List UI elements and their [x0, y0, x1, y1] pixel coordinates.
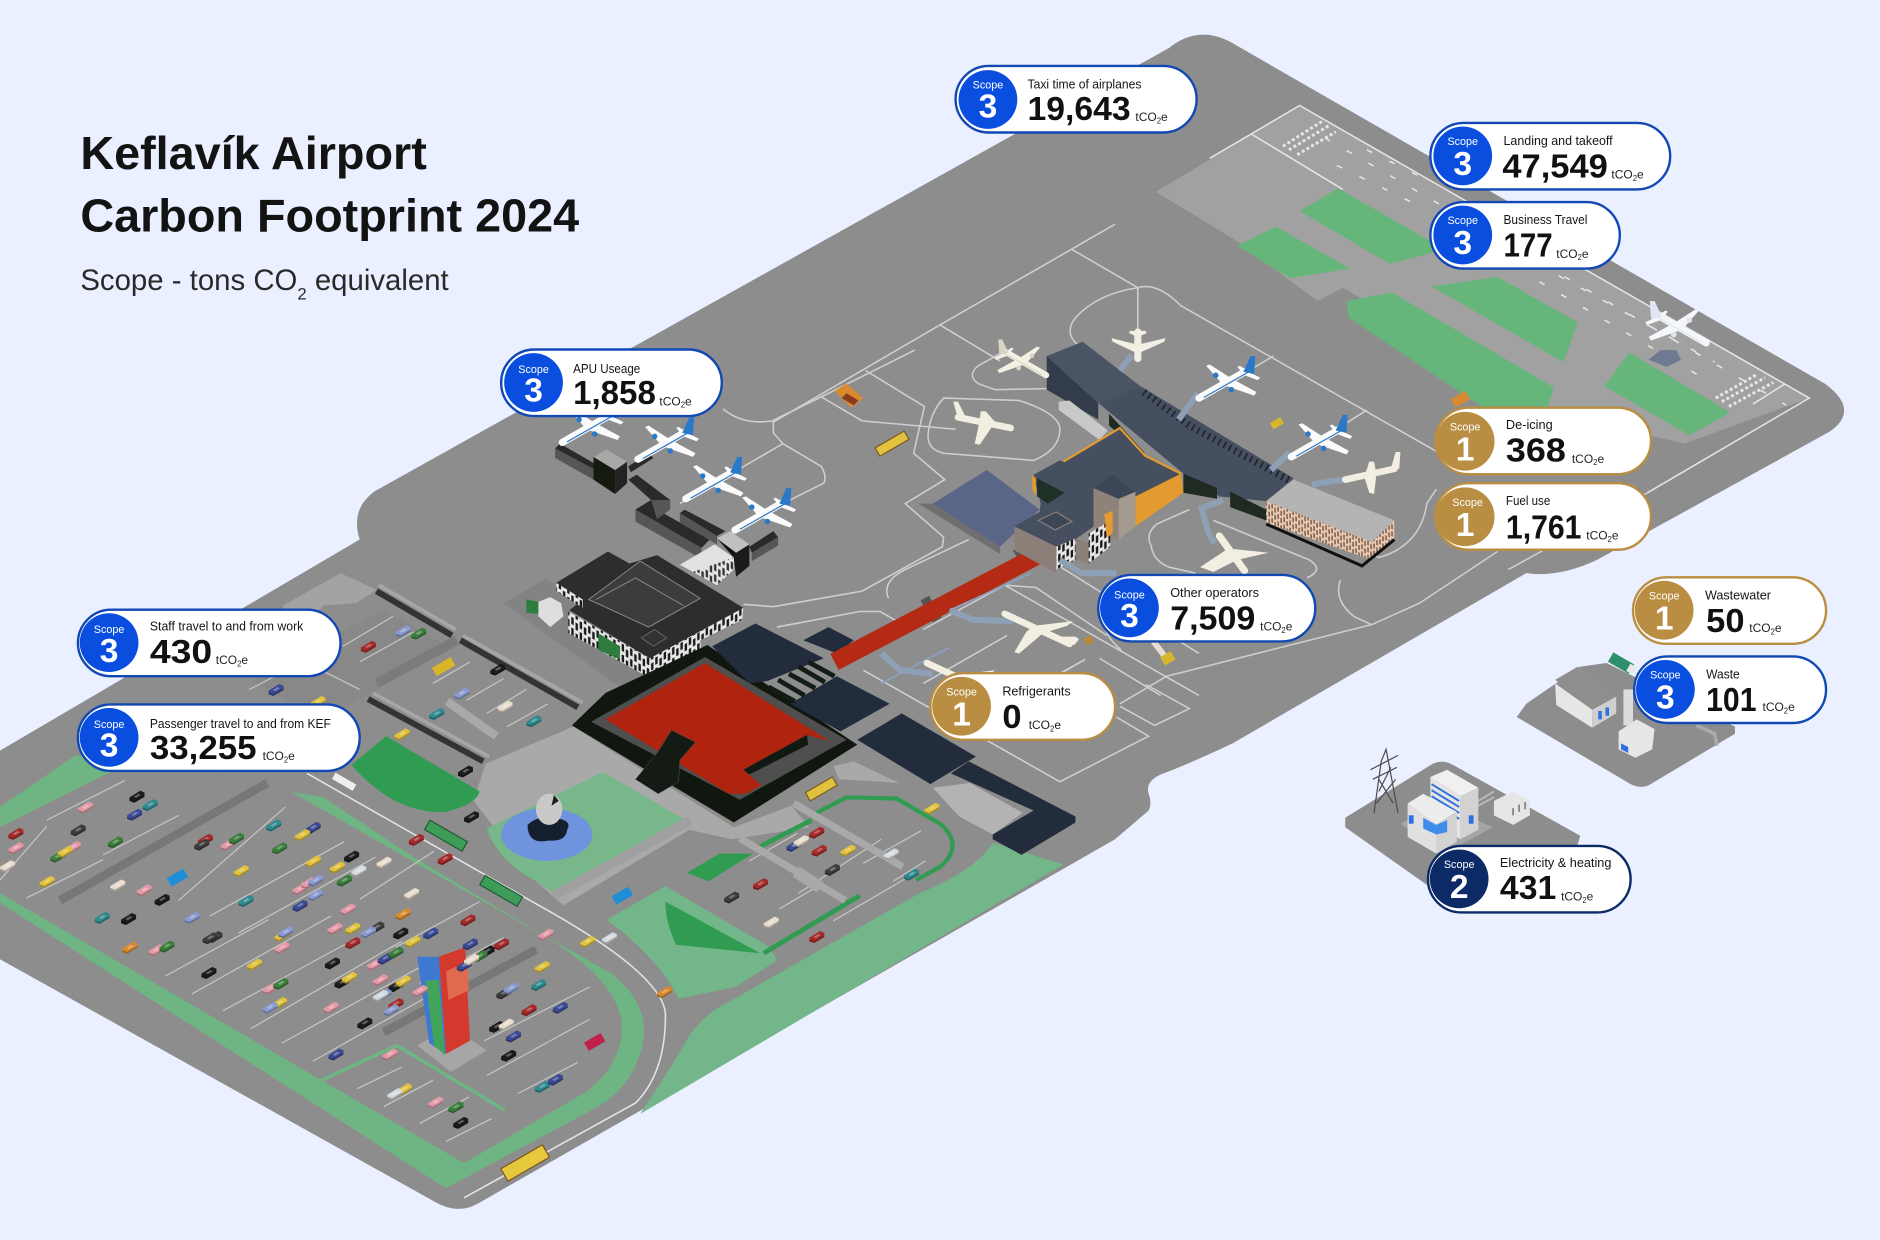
- pill: waste: 101: [1706, 682, 1757, 719]
- pill: refrigerants: [930, 673, 1115, 740]
- aircraft: runway with shadow: [1645, 301, 1706, 367]
- pill: APU useage: e: [685, 394, 692, 408]
- pill: refrigerants: 1: [952, 696, 971, 733]
- pill: landing and takeoff: e: [1637, 168, 1644, 182]
- vehicle: yellow bus road: [501, 1145, 550, 1181]
- pill: electricity and heating: 2: [1450, 869, 1468, 906]
- glass hall: [1266, 480, 1394, 542]
- apron taxi lines: [680, 224, 1647, 782]
- pill: wastewater: tCO: [1749, 621, 1771, 635]
- glazing strip: [743, 735, 808, 775]
- heading: Keflavík Airport: [80, 127, 427, 179]
- pill: de-icing: tCO: [1572, 452, 1593, 466]
- pill: waste: 3: [1656, 680, 1675, 717]
- atrium glazing: [1037, 478, 1065, 504]
- pill: taxi time of airplanes: tCO: [1135, 110, 1157, 124]
- pill: landing and takeoff: Scope: [1447, 136, 1478, 148]
- generators: [1478, 791, 1530, 825]
- pill: business travel: 3: [1453, 225, 1472, 262]
- pill: passenger travel: [78, 704, 360, 771]
- pill: passenger travel: 2: [284, 756, 288, 765]
- sculpture tower base: [417, 1026, 487, 1072]
- pill: taxi time of airplanes: 3: [979, 89, 997, 126]
- vehicle: yellow cart: [1270, 417, 1284, 429]
- aircraft: pier tip plane: [1200, 536, 1269, 572]
- office roof: [1014, 428, 1181, 547]
- plaza wall: [554, 820, 691, 896]
- aircraft: east stand plane: [1345, 452, 1400, 494]
- pill: other operators: Other operators: [1170, 586, 1259, 600]
- pill: APU useage: 2: [681, 401, 685, 410]
- runway grass strips: [1237, 188, 1730, 435]
- subtitle: Scope - tons CO: [80, 264, 297, 297]
- pill: business travel: e: [1582, 247, 1589, 261]
- vehicle: white truck: [332, 773, 356, 791]
- vehicle: yellow bus apron: [875, 431, 909, 456]
- pill: other operators: Scope: [1114, 589, 1145, 601]
- rainbow tower sculpture: [417, 947, 470, 1055]
- lower walls: [1014, 526, 1056, 573]
- waste plant island: [1517, 652, 1735, 787]
- pill: fuel use: 2: [1608, 535, 1612, 544]
- pill: landing and takeoff: 47,549: [1502, 148, 1608, 185]
- vehicle: blue van road: [612, 887, 633, 905]
- pill: business travel: Business Travel: [1504, 213, 1587, 227]
- pill: fuel use: [1435, 483, 1651, 550]
- pill: APU useage: 3: [524, 373, 543, 410]
- parking bays: [0, 781, 590, 1141]
- pill: APU useage: APU Useage: [573, 362, 640, 376]
- power station building: [1408, 770, 1478, 854]
- terminal forecourt: [474, 727, 1023, 905]
- incinerator and chimney: [1619, 689, 1655, 758]
- pill: fuel use: tCO: [1586, 529, 1608, 543]
- main terminal: [572, 623, 1075, 855]
- glazing: [1183, 474, 1217, 499]
- pill: de-icing: 1: [1456, 431, 1474, 468]
- pill: APU useage: Scope: [518, 364, 549, 376]
- pill: de-icing: 2: [1593, 458, 1597, 467]
- title: [80, 127, 579, 304]
- pill: passenger travel: Scope: [94, 719, 124, 731]
- red connector corridor: [834, 554, 1041, 683]
- vehicle: baggage tug: [1084, 635, 1094, 645]
- pill: de-icing: 368: [1506, 433, 1566, 470]
- perimeter road lines: [307, 773, 665, 1198]
- pill: other operators: tCO: [1260, 620, 1281, 634]
- side annex: [538, 597, 564, 627]
- ground vehicles: [167, 384, 1470, 1181]
- pill: wastewater: Scope: [1649, 590, 1679, 602]
- old terminal building: [526, 552, 743, 680]
- vehicle: green bus: [425, 820, 467, 851]
- pill: landing and takeoff: tCO: [1611, 168, 1633, 182]
- pill: electricity and heating: [1428, 846, 1631, 912]
- pill: fuel use: Scope: [1452, 497, 1483, 509]
- pill: landing and takeoff: 2: [1633, 174, 1637, 183]
- pill: APU useage: tCO: [659, 394, 681, 408]
- pier block: [1047, 356, 1098, 420]
- orange wall: [1135, 474, 1183, 526]
- front car park: [740, 803, 926, 921]
- pill: APU useage: 1,858: [573, 375, 656, 412]
- pill: staff travel: 3: [100, 633, 118, 670]
- stair stripes: [769, 662, 834, 701]
- pill: business travel: Scope: [1447, 215, 1478, 227]
- pill: taxi time of airplanes: Scope: [973, 80, 1003, 92]
- pill: de-icing: Scope: [1450, 421, 1480, 433]
- dark grass patch: [351, 736, 480, 812]
- pill: wastewater: 2: [1771, 627, 1775, 636]
- pill: wastewater: 1: [1655, 600, 1674, 637]
- aircraft: apron stand plane: [953, 402, 1011, 445]
- upper car park: [249, 573, 583, 769]
- pill: staff travel: [78, 610, 341, 676]
- pill: landing and takeoff: 3: [1453, 146, 1472, 183]
- pill: electricity and heating: Electricity & heating: [1500, 856, 1611, 870]
- runway markings: [1210, 106, 1809, 493]
- aircraft: cream at north stand: [994, 339, 1046, 375]
- pill: other operators: e: [1286, 620, 1293, 634]
- old terminal pad: [504, 579, 719, 707]
- pill: passenger travel: e: [288, 749, 295, 763]
- pill: electricity and heating: e: [1587, 889, 1594, 903]
- waste truck: [1608, 652, 1637, 674]
- pill: taxi time of airplanes: Taxi time of airplanes: [1028, 78, 1141, 92]
- pill: waste: Scope: [1650, 670, 1681, 682]
- subtitle: equivalent: [307, 264, 449, 297]
- pill: waste: [1634, 656, 1826, 723]
- pill: electricity and heating: 2: [1582, 896, 1587, 905]
- pill: wastewater: 50: [1706, 603, 1745, 640]
- pill: de-icing: [1435, 408, 1651, 474]
- pill: waste: e: [1788, 700, 1795, 714]
- pill: passenger travel: tCO: [263, 749, 284, 763]
- pill: passenger travel: 3: [100, 728, 118, 765]
- aircraft: nose-in gate plane: [1111, 331, 1165, 358]
- pill: wastewater: e: [1775, 621, 1782, 635]
- vehicle: blue van: [167, 869, 188, 887]
- pill: electricity and heating: tCO: [1561, 889, 1582, 903]
- aircraft: north pier: [562, 400, 796, 530]
- pill: refrigerants: 2: [1050, 724, 1054, 733]
- pill: staff travel: 430: [150, 634, 212, 671]
- pill: fuel use: 1,761: [1506, 509, 1581, 546]
- aircraft: lower apron: [927, 614, 1079, 703]
- pill: waste: tCO: [1762, 700, 1784, 714]
- heading line 2: Carbon Footprint 2024: [80, 189, 579, 241]
- pill: refrigerants: tCO: [1029, 718, 1050, 732]
- pill: other operators: 2: [1281, 626, 1286, 635]
- vehicle: yellow bus terminal: [805, 777, 837, 801]
- pill: taxi time of airplanes: 2: [1157, 116, 1161, 125]
- pill: electricity and heating: 431: [1500, 870, 1556, 907]
- pill: staff travel: 2: [237, 660, 241, 669]
- pill: staff travel: e: [241, 653, 248, 667]
- divider walls: [60, 783, 267, 900]
- east terminal buildings: [1014, 342, 1394, 573]
- vehicle: orange de-icing truck: [834, 384, 863, 408]
- pill: business travel: 177: [1504, 228, 1553, 265]
- pill: electricity and heating: Scope: [1444, 859, 1474, 871]
- pill: landing and takeoff: [1430, 123, 1670, 189]
- pill: other operators: [1098, 575, 1315, 641]
- subtitle: 2: [297, 285, 307, 304]
- entrance porch: [635, 730, 695, 794]
- vehicle: orange cart: [1451, 391, 1470, 408]
- pill: refrigerants: 0: [1002, 699, 1022, 736]
- control tower: [1093, 488, 1119, 540]
- pill: business travel: [1430, 202, 1620, 269]
- factory building: [1555, 667, 1616, 728]
- pipes: [1697, 725, 1717, 746]
- pill: de-icing: e: [1597, 452, 1604, 466]
- pill: passenger travel: Passenger travel to and from KEF: [150, 717, 331, 731]
- vehicle: red van: [584, 1033, 605, 1051]
- roof kiosk: [1038, 512, 1072, 530]
- pill: wastewater: Wastewater: [1705, 588, 1771, 602]
- light ramp: [1059, 400, 1108, 440]
- fountain plaza grass: [487, 772, 686, 893]
- hangar: [918, 470, 1040, 554]
- vehicle: catering truck: [1153, 641, 1175, 665]
- pill: de-icing: De-icing: [1506, 418, 1553, 432]
- vehicle: green bus: [480, 875, 523, 906]
- pill: passenger travel: 33,255: [150, 730, 257, 767]
- main car park: [0, 767, 622, 1163]
- electricity pylon: [1370, 749, 1398, 813]
- north pier: [555, 444, 778, 585]
- pill: staff travel: Staff travel to and from work: [150, 620, 304, 634]
- pill: fuel use: 1: [1456, 507, 1474, 544]
- pill: wastewater: [1633, 577, 1826, 644]
- vehicle: yellow van: [432, 657, 455, 676]
- pill: staff travel: tCO: [216, 653, 237, 667]
- fountain pool: [501, 808, 592, 861]
- pill: taxi time of airplanes: 19,643: [1028, 91, 1131, 128]
- navy roof blocks: [712, 623, 824, 683]
- pill: taxi time of airplanes: e: [1161, 110, 1168, 124]
- jet bridges: [881, 355, 1343, 674]
- egg sculpture: [528, 794, 569, 841]
- right grass: [607, 797, 1063, 1114]
- pill: other operators: 7,509: [1170, 600, 1255, 637]
- runway area: [1156, 106, 1809, 493]
- pill: fuel use: e: [1612, 529, 1619, 543]
- pier roof: [1098, 386, 1294, 501]
- power plant island: [1345, 749, 1580, 893]
- pill: landing and takeoff: Landing and takeoff: [1504, 134, 1613, 148]
- pill: staff travel: Scope: [94, 624, 124, 636]
- pill: business travel: 2: [1578, 253, 1582, 262]
- pill: APU useage: [501, 350, 722, 416]
- pill: refrigerants: e: [1054, 718, 1061, 732]
- pill: taxi time of airplanes: [956, 66, 1197, 132]
- main car park grass: [0, 755, 644, 1188]
- pill: refrigerants: Refrigerants: [1002, 684, 1071, 698]
- pill: business travel: tCO: [1556, 247, 1578, 261]
- pill: waste: Waste: [1706, 668, 1740, 682]
- pill: refrigerants: Scope: [946, 686, 977, 698]
- aircraft: [562, 301, 1706, 703]
- aircraft: east pier: [1199, 356, 1352, 457]
- grass dividers: [321, 1046, 505, 1110]
- red roof: [605, 663, 830, 794]
- parked cars: [0, 625, 939, 1129]
- pill: waste: 2: [1784, 706, 1788, 715]
- pill: other operators: 3: [1120, 598, 1139, 635]
- pill: fuel use: Fuel use: [1506, 494, 1550, 508]
